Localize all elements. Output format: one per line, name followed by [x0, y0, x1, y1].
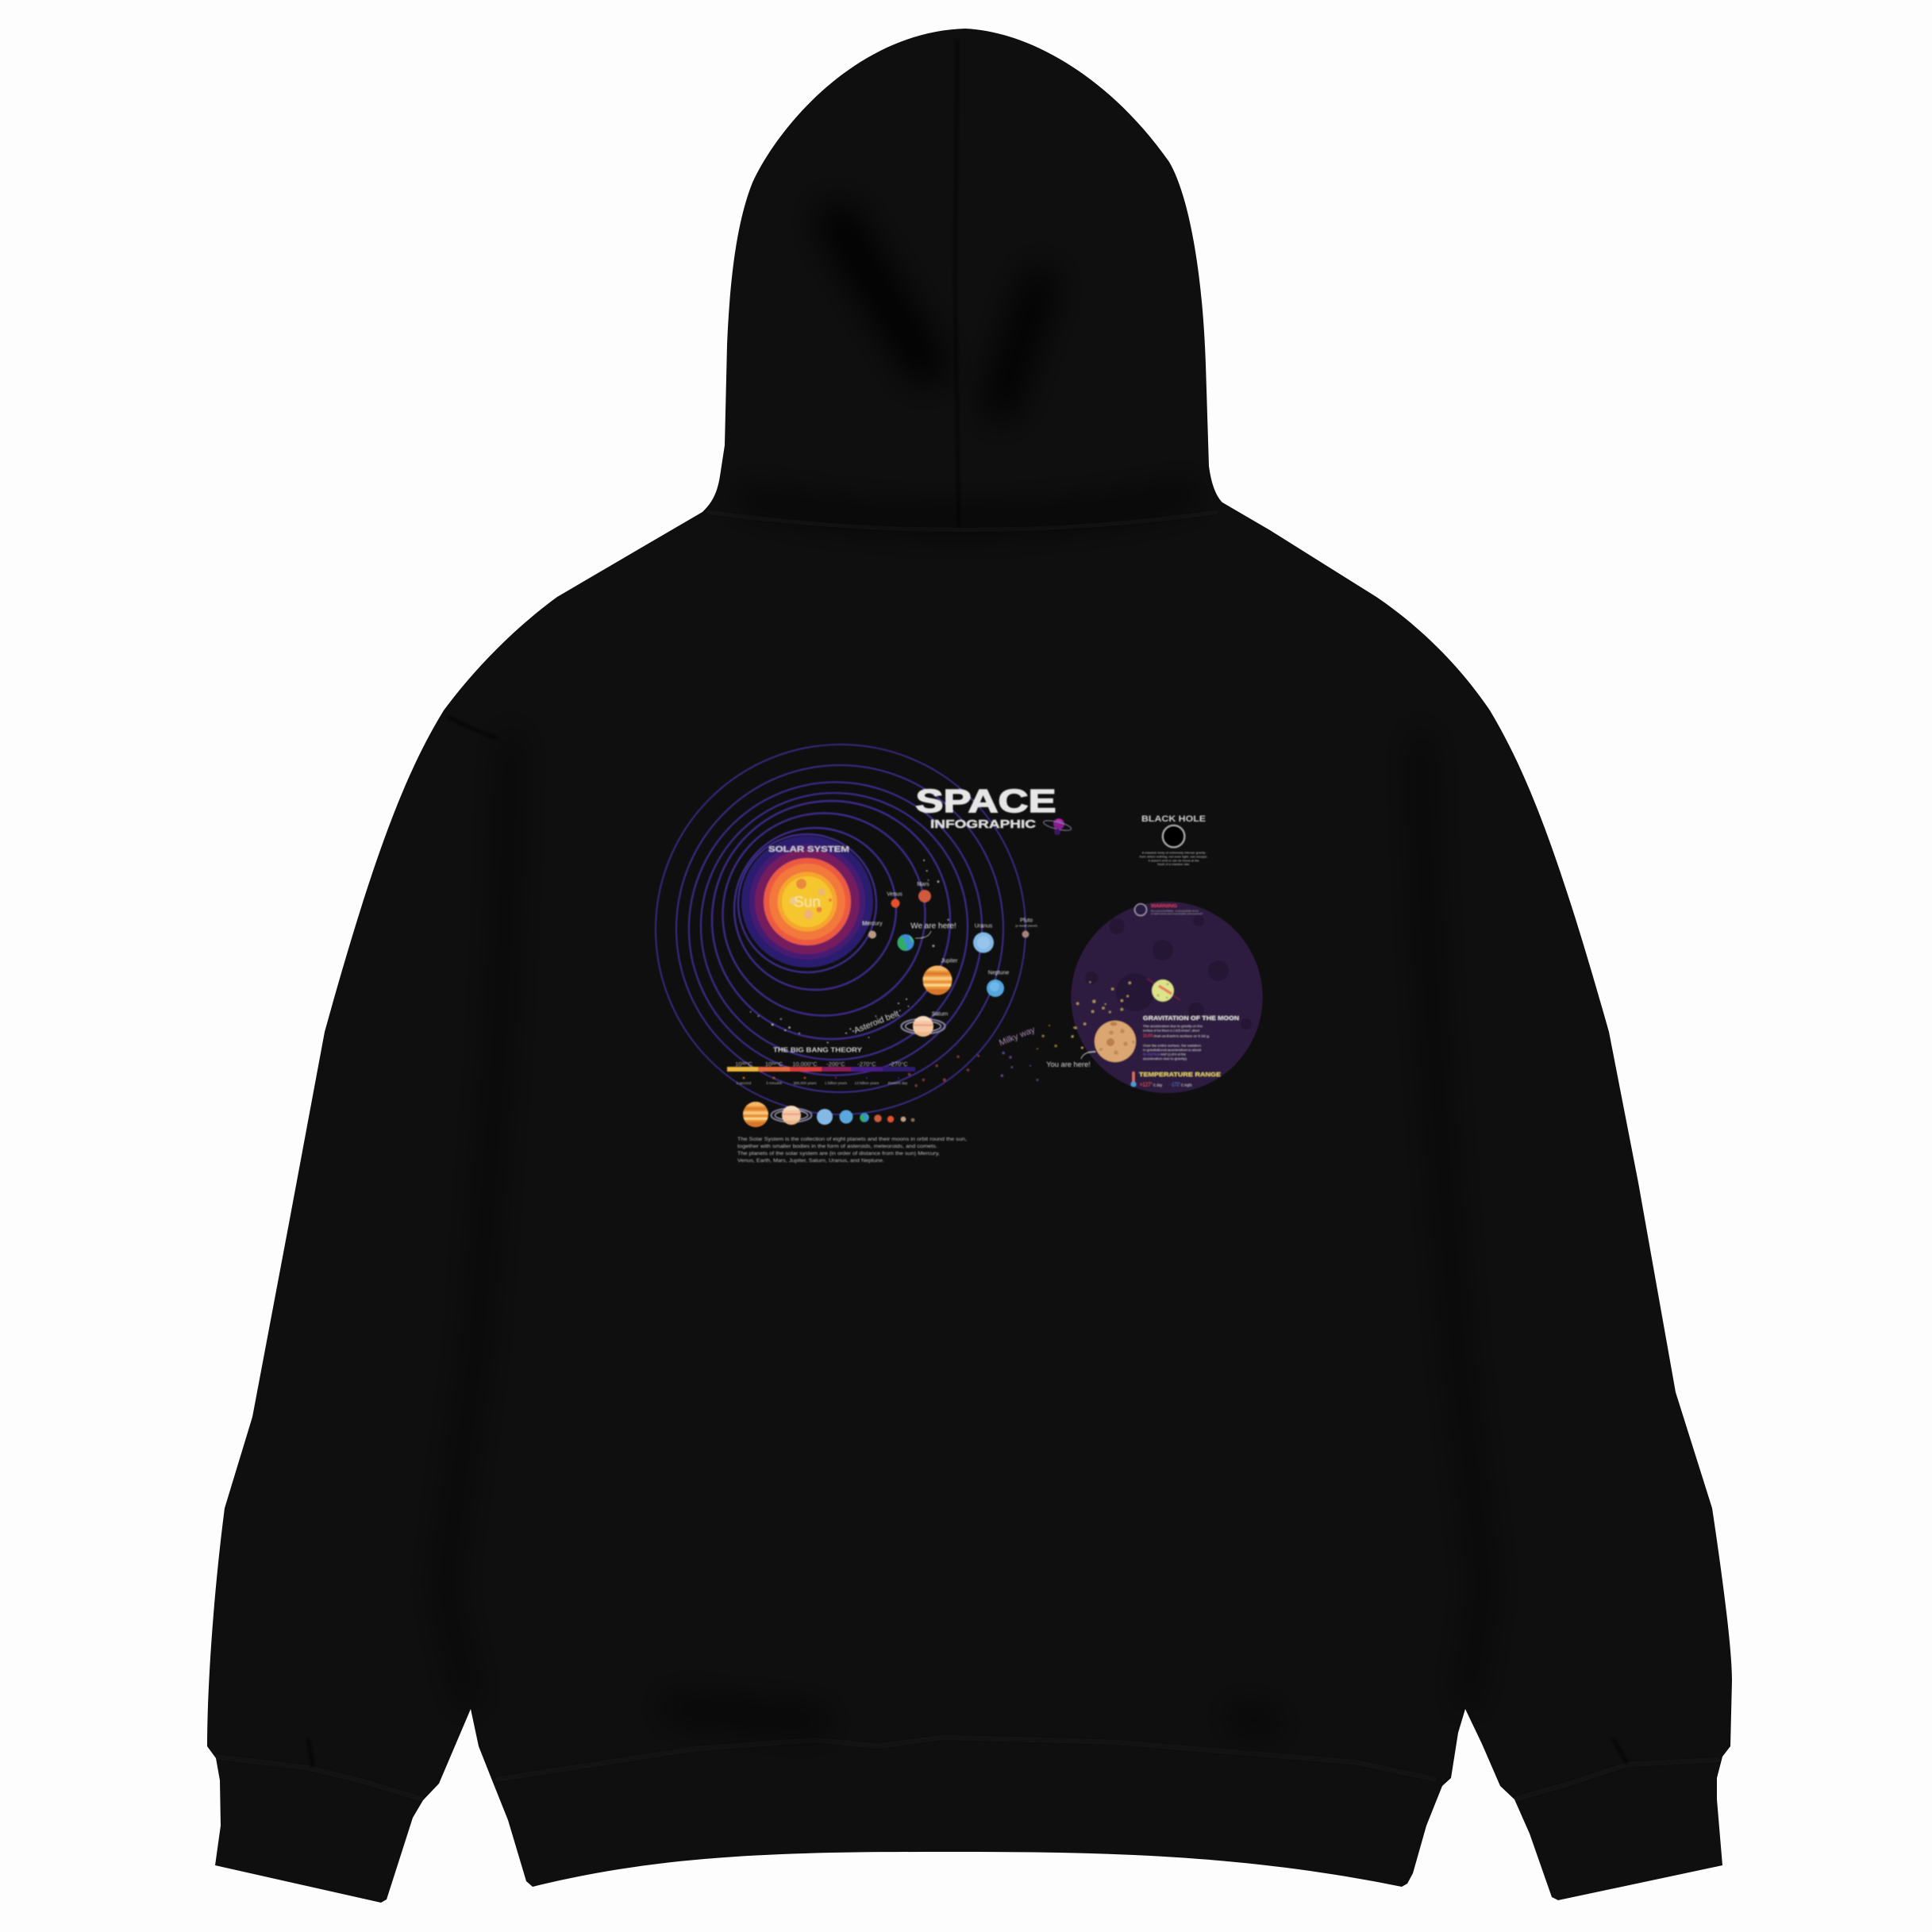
temperature values: C day	[1153, 1083, 1163, 1087]
planet: Pluto	[1015, 918, 1038, 938]
planet: Neptune: Neptune	[988, 970, 1009, 976]
solar system description: The Solar System is the collection of eight planets and their moons in orbit round the sun,	[737, 1137, 967, 1142]
hoodie silhouette	[207, 29, 1732, 1903]
timeline temperatures: 10¹⁶°C	[765, 1060, 783, 1068]
scattered stars	[750, 860, 1076, 1087]
black hole description: It doesn't emit or can be found at the	[1149, 859, 1199, 862]
timeline time labels: 1 second	[737, 1081, 752, 1085]
you are here callout	[1046, 1052, 1095, 1068]
gravitation text: Over the entire surface, the variation	[1143, 1043, 1201, 1048]
planet: Mars: Mars	[917, 882, 929, 887]
black hole heading: BLACK HOLE	[1141, 814, 1206, 824]
planet: Neptune	[987, 970, 1009, 997]
timeline time labels: 13 billion years	[855, 1081, 879, 1085]
subtitle: infographic: INFOGRAPHIC	[930, 818, 1036, 831]
timeline time labels	[737, 1081, 908, 1085]
icon: black hole circle	[1163, 826, 1185, 848]
gravitation text: in gravitational acceleration is about	[1143, 1048, 1202, 1052]
timeline time labels: 300,000 years	[793, 1081, 817, 1085]
planet: Mercury: Mercury	[862, 921, 883, 927]
planet: Mercury	[862, 921, 883, 938]
planet: Pluto: Pluto	[1020, 918, 1033, 924]
gravitation text: 0.0253	[1143, 1053, 1160, 1056]
icon: small ringed planet	[1042, 818, 1072, 835]
you are here callout: You are here!	[1046, 1060, 1091, 1068]
big cratered planet	[1095, 1021, 1136, 1062]
planet: Saturn: Saturn	[932, 1011, 948, 1018]
panel: moon	[1046, 902, 1263, 1093]
warning icon and note: An uncontrollable, unstoppable force	[1151, 910, 1199, 913]
planet: Uranus	[973, 924, 994, 953]
gravitation text: The acceleration due to gravity on the	[1143, 1024, 1203, 1028]
panel: black hole	[1140, 814, 1208, 866]
title: space: SPACE	[916, 783, 1056, 819]
hoodie body fill	[207, 29, 1732, 1903]
heading: solar system: SOLAR SYSTEM	[768, 845, 849, 854]
warning icon and note: WARNING	[1151, 904, 1177, 909]
timeline temperatures: -270°C	[889, 1060, 908, 1068]
solar system description: The planets of the solar system are (in order of distance from the sun) Mercury,	[737, 1151, 940, 1157]
moon dust dots	[1071, 981, 1131, 1049]
sun with glowing layers	[741, 836, 873, 968]
gravitation text: m/s² (1.6% of the	[1160, 1053, 1187, 1056]
solar system description	[737, 1137, 967, 1164]
sun label: Sun	[794, 894, 821, 911]
heading: the big bang theory: THE BIG BANG THEORY	[773, 1046, 862, 1054]
milky way label: Milky way	[998, 1025, 1037, 1048]
planet: Jupiter: Jupiter	[941, 959, 958, 964]
temperature values: C night	[1181, 1083, 1192, 1087]
temperature values	[1140, 1081, 1192, 1087]
black hole description: from which nothing, not even light, can escape.	[1140, 856, 1208, 859]
heading: gravitation of the moon: GRAVITATION OF THE MOON	[1143, 1014, 1239, 1022]
planet: Earth with callout	[897, 922, 956, 951]
planet: Earth with callout: We are here!	[910, 922, 956, 930]
gravitation text	[1143, 1024, 1210, 1060]
solar system description: Venus, Earth, Mars, Jupiter, Saturn, Uranus, and Neptune.	[737, 1158, 884, 1164]
warning icon and note	[1135, 903, 1203, 916]
timeline temperatures: 10³²°C	[735, 1060, 752, 1068]
hoodie folds and seams	[214, 217, 1515, 1802]
gravitation text: surface of the Moon is 1.625 m/sec², about	[1143, 1029, 1200, 1032]
timeline temperatures	[735, 1060, 908, 1068]
warning icon and note: of dark forces and inexplicable phenomena?	[1151, 912, 1203, 915]
planet: Saturn	[901, 1011, 948, 1037]
planet: Venus	[887, 892, 902, 908]
gravitation text: that on Earth's surface or 9.18 g.	[1154, 1033, 1210, 1038]
solar system description: together with smaller bodies in the form of asteroids, meteoroids, and comets.	[737, 1144, 937, 1149]
planet: Venus: Venus	[887, 892, 902, 897]
panel: solar system orbits	[656, 745, 1026, 1114]
timeline time labels: 3 minutes	[766, 1081, 783, 1085]
timeline time labels: 1 billion years	[825, 1081, 848, 1085]
planet: Pluto: (a dwarf planet)	[1015, 924, 1038, 927]
moon disc	[1071, 902, 1263, 1093]
big bang timeline bar	[727, 1067, 915, 1080]
small yellow moon	[1147, 979, 1180, 1002]
black hole description: heart of a massive star.	[1157, 863, 1190, 866]
planet: Jupiter	[922, 959, 958, 995]
printed space infographic	[656, 745, 1263, 1164]
icon: thermometer	[1131, 1072, 1136, 1087]
gravitation text: acceleration due to gravity).	[1143, 1056, 1187, 1060]
heading: temperature range: TEMPERATURE RANGE	[1139, 1071, 1221, 1078]
planet: Mars	[917, 882, 931, 902]
black hole description: A massive body of extremely intense gravity	[1142, 851, 1206, 854]
temperature values: -173°	[1171, 1081, 1180, 1087]
moon craters	[1085, 915, 1252, 1030]
asteroid belt label: Asteroid belt	[852, 1009, 900, 1036]
timeline temperatures: -200°C	[826, 1060, 845, 1068]
planet size comparison row	[743, 1102, 914, 1127]
black hole description	[1140, 851, 1208, 866]
gravitation text: 16.6%	[1143, 1033, 1153, 1038]
timeline temperatures: -270°C	[857, 1060, 876, 1068]
timeline temperatures: 10,000°C	[792, 1060, 818, 1068]
temperature values: +127°	[1140, 1081, 1153, 1087]
planet: Uranus: Uranus	[975, 924, 993, 929]
timeline time labels: Present day	[888, 1081, 908, 1085]
